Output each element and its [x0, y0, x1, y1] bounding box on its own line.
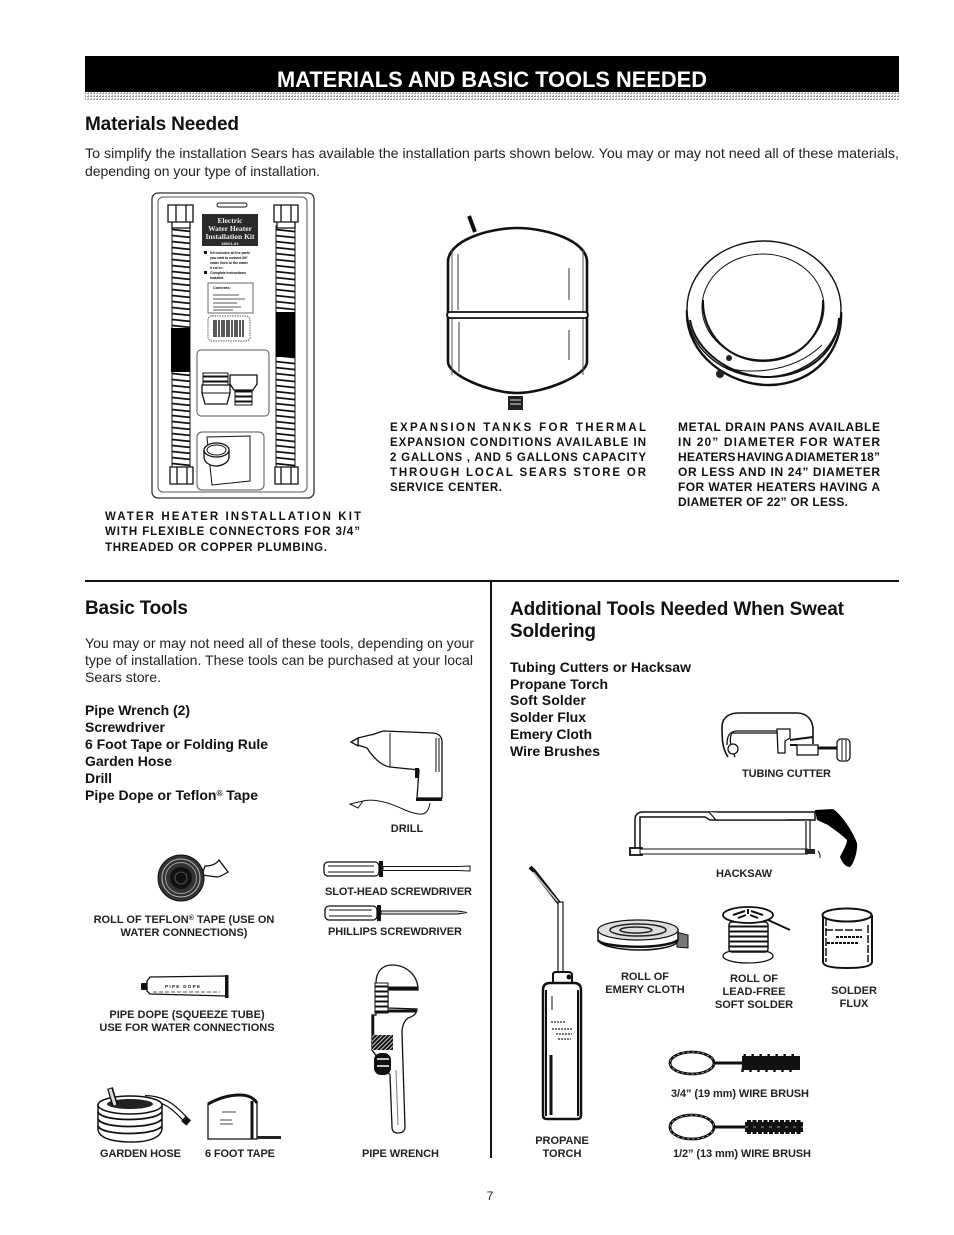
intro paragraph: To simplify the installation Sears has available the installation parts shown below. You may or may not need all of these materials, — [85, 145, 899, 161]
kit contents box — [208, 283, 253, 313]
caption: installation kit: WITH FLEXIBLE CONNECTORS FOR 3/4” — [105, 526, 360, 538]
caption: lead-free soft solder: SOFT SOLDER — [715, 999, 793, 1011]
right hose — [274, 205, 298, 484]
caption: 3/4 inch wire brush: 3/4” (19 mm) WIRE BRUSH — [671, 1088, 809, 1100]
illustration: metal drain pan — [687, 241, 841, 385]
kit label: Installation Kit — [206, 232, 255, 241]
caption: lead-free soft solder: LEAD-FREE — [723, 986, 785, 998]
caption: slot-head screwdriver: SLOT-HEAD SCREWDRIVER — [325, 886, 472, 898]
kit bullets: water lines to the water — [209, 261, 249, 265]
caption: drain pans: DIAMETER OF 22” OR LESS. — [678, 495, 848, 509]
caption: lead-free soft solder: ROLL OF — [730, 973, 778, 985]
icon: tubing cutter — [722, 713, 850, 761]
icon: slot-head screwdriver — [324, 861, 470, 877]
kit bullets: Complete instructions — [210, 271, 246, 275]
additional tools list: Wire Brushes — [510, 743, 600, 759]
page number: 7 — [487, 1189, 494, 1203]
icon: hacksaw — [630, 809, 857, 867]
kit bullets — [204, 251, 250, 280]
caption: teflon tape: WATER CONNECTIONS) — [121, 927, 248, 939]
kit bullets: included. — [210, 276, 224, 280]
icon: pipe dope tube: PIPE DOPE — [165, 984, 200, 989]
caption: drain pans: OR LESS AND IN 24” DIAMETER — [678, 465, 880, 479]
caption: hacksaw: HACKSAW — [716, 868, 773, 880]
basic tools paragraph: Sears store. — [85, 669, 161, 685]
heading: additional tools — [510, 599, 845, 642]
caption: drain pans: FOR WATER HEATERS HAVING A — [678, 480, 880, 494]
basic tools list: ® — [216, 789, 222, 798]
caption: pipe dope: PIPE DOPE (SQUEEZE TUBE) — [109, 1009, 265, 1021]
caption: expansion tanks: THROUGH LOCAL SEARS STORE OR — [390, 467, 647, 479]
kit bullets: heater. — [210, 266, 224, 270]
basic tools paragraph: You may or may not need all of these tools, depending on your — [85, 635, 474, 651]
basic tools list: Pipe Dope or Teflon — [85, 787, 216, 803]
heading: materials needed: Materials Needed — [85, 114, 239, 135]
kit bullets: you need to connect 3/4" — [210, 256, 248, 260]
left hose — [168, 205, 193, 484]
illustration: expansion tank — [447, 216, 588, 410]
intro paragraph — [85, 145, 899, 179]
basic tools list: 6 Foot Tape or Folding Rule — [85, 736, 268, 752]
caption: expansion tanks — [390, 422, 647, 494]
basic tools list: Screwdriver — [85, 719, 166, 735]
kit contents box: Contents: — [213, 286, 231, 290]
heading: additional tools: Soldering — [510, 621, 596, 642]
icon: solder flux can — [822, 908, 872, 968]
icon: propane torch — [530, 867, 581, 1119]
icon: drill — [350, 731, 442, 814]
additional tools list: Propane Torch — [510, 676, 608, 692]
additional tools list: Emery Cloth — [510, 726, 592, 742]
caption: propane torch — [535, 1135, 589, 1160]
icon: pipe dope tube — [141, 975, 228, 998]
caption: emery cloth: EMERY CLOTH — [605, 984, 685, 996]
caption: tubing cutter: TUBING CUTTER — [742, 768, 831, 780]
basic tools list: Garden Hose — [85, 753, 172, 769]
kit label — [202, 214, 258, 246]
additional tools list: Solder Flux — [510, 709, 586, 725]
icon: garden hose — [98, 1088, 191, 1142]
additional tools list — [510, 659, 691, 759]
caption: propane torch: PROPANE — [535, 1135, 589, 1147]
caption: expansion tanks: SERVICE CENTER. — [390, 482, 502, 494]
icon: teflon tape roll — [158, 855, 228, 901]
heading: basic tools: Basic Tools — [85, 598, 188, 619]
kit label: Electric — [218, 216, 243, 225]
basic tools list: Tape — [222, 787, 258, 803]
basic tools paragraph: type of installation. These tools can be purchased at your local — [85, 652, 473, 668]
washer window — [197, 432, 264, 490]
caption: phillips screwdriver: PHILLIPS SCREWDRIVER — [328, 926, 462, 938]
caption: emery cloth — [605, 971, 685, 996]
icon: lead-free solder spool — [723, 907, 790, 963]
banner title: MATERIALS AND BASIC TOOLS NEEDED — [277, 67, 707, 92]
fittings window — [197, 350, 269, 416]
caption: 1/2 inch wire brush: 1/2” (13 mm) WIRE BRUSH — [673, 1148, 811, 1160]
caption: garden hose: GARDEN HOSE — [100, 1148, 181, 1160]
basic tools list: Pipe Wrench (2) — [85, 702, 190, 718]
kit label: 69001-04 — [222, 241, 239, 246]
caption: emery cloth: ROLL OF — [621, 971, 669, 983]
kit label: Water Heater — [208, 224, 253, 233]
caption: pipe dope — [99, 1009, 275, 1034]
icon: pipe wrench — [372, 965, 418, 1133]
caption: expansion tanks: EXPANSION CONDITIONS AVAILABLE IN — [390, 437, 646, 449]
caption: solder flux — [831, 985, 877, 1010]
caption: solder flux: FLUX — [840, 998, 869, 1010]
caption: drain pans: METAL DRAIN PANS AVAILABLE — [678, 420, 880, 434]
caption: installation kit: THREADED OR COPPER PLUMBING. — [105, 542, 327, 554]
caption: drill: DRILL — [391, 823, 423, 835]
caption: teflon tape — [94, 914, 274, 939]
barcode — [208, 316, 250, 341]
caption: installation kit: WATER HEATER INSTALLATION KIT — [105, 511, 361, 523]
caption: pipe wrench: PIPE WRENCH — [362, 1148, 439, 1160]
icon: 3/4 inch wire brush — [670, 1052, 800, 1074]
basic tools paragraph — [85, 635, 474, 685]
caption: solder flux: SOLDER — [831, 985, 877, 997]
additional tools list: Soft Solder — [510, 692, 587, 708]
caption: propane torch: TORCH — [543, 1148, 582, 1160]
icon: roll of emery cloth — [598, 920, 688, 950]
heading: additional tools: Additional Tools Needed When Sweat — [510, 599, 845, 620]
kit bullets: Kit includes all the parts — [210, 251, 250, 255]
caption: drain pans: HEATERS HAVING A DIAMETER 18” — [678, 450, 880, 464]
caption: 6 foot tape: 6 FOOT TAPE — [205, 1148, 275, 1160]
caption: drain pans — [678, 420, 880, 509]
caption: teflon tape: ROLL OF TEFLON — [94, 914, 189, 926]
caption: lead-free soft solder — [715, 973, 793, 1011]
caption: teflon tape: ® — [189, 914, 195, 922]
panel: basic tools — [85, 598, 474, 1160]
caption: expansion tanks: 2 GALLONS , AND 5 GALLONS CAPACITY — [390, 452, 646, 464]
caption: pipe dope: USE FOR WATER CONNECTIONS — [99, 1022, 275, 1034]
header banner — [85, 56, 899, 101]
caption: drain pans: IN 20” DIAMETER FOR WATER — [678, 435, 880, 449]
basic tools list: Drill — [85, 770, 112, 786]
basic tools list — [85, 702, 268, 803]
icon: 6 foot tape measure — [208, 1095, 281, 1139]
caption: installation kit — [105, 511, 361, 554]
intro paragraph: depending on your type of installation. — [85, 163, 320, 179]
additional tools list: Tubing Cutters or Hacksaw — [510, 659, 691, 675]
icon: phillips screwdriver — [325, 905, 467, 921]
icon: 1/2 inch wire brush — [670, 1115, 803, 1139]
illustration: water heater installation kit — [152, 193, 314, 498]
panel: additional tools for sweat soldering — [510, 599, 877, 1160]
caption: teflon tape: TAPE (USE ON — [194, 914, 274, 926]
caption: expansion tanks: EXPANSION TANKS FOR THERMAL — [390, 422, 646, 434]
